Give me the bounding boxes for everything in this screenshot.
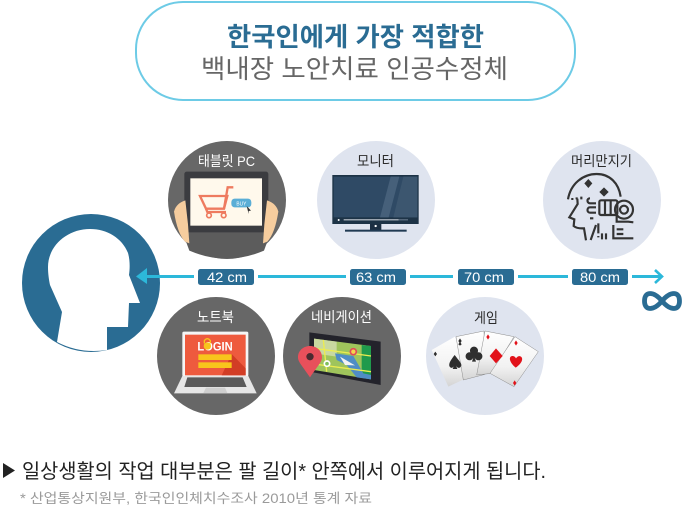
distance axis arrow xyxy=(136,268,662,284)
panel: hair dryer xyxy=(543,141,661,259)
label: game: 게임 xyxy=(474,310,498,326)
panel: monitor xyxy=(317,141,435,259)
icon: bullet triangle xyxy=(3,463,15,478)
icon: laptop login: LOGIN xyxy=(197,340,233,353)
badge: 63 cm xyxy=(350,269,406,285)
badge: 63 cm: 63 cm xyxy=(356,269,396,285)
badge: 80 cm: 80 cm xyxy=(580,269,620,285)
badge: 42 cm xyxy=(198,269,254,285)
icon: navigation device xyxy=(298,332,381,385)
title line 2: 백내장 노안치료 인공수정체 xyxy=(201,54,508,84)
icon: monitor xyxy=(332,175,419,232)
panel: tablet PC xyxy=(168,141,286,259)
badge: 70 cm xyxy=(458,269,514,285)
badge: 70 cm: 70 cm xyxy=(464,269,504,285)
panel: card game xyxy=(426,297,544,415)
label: laptop: 노트북 xyxy=(197,309,234,325)
label: tablet PC: 태블릿 PC xyxy=(198,153,255,169)
source footnote: * 산업통상지원부, 한국인인체치수조사 2010년 통계 자료 xyxy=(20,491,372,506)
icon: infinity xyxy=(644,294,680,308)
badge: 80 cm xyxy=(572,269,628,285)
label: monitor: 모니터 xyxy=(357,153,394,169)
panel: navigation xyxy=(283,297,401,415)
icon: playing cards xyxy=(432,331,538,387)
conclusion text: 일상생활의 작업 대부분은 팔 길이* 안쪽에서 이루어지게 됩니다. xyxy=(22,460,546,483)
label: hair dryer: 머리만지기 xyxy=(571,153,632,169)
icon: tablet with cart: BUY xyxy=(236,201,247,207)
title line 1: 한국인에게 가장 적합한 xyxy=(227,22,484,52)
badge: 42 cm: 42 cm xyxy=(207,269,247,285)
label: navigation: 네비게이션 xyxy=(311,309,372,325)
viewer head icon xyxy=(22,214,160,352)
icon: hair dryer line art xyxy=(568,174,633,240)
title pill xyxy=(136,2,575,100)
panel: laptop xyxy=(157,297,275,415)
